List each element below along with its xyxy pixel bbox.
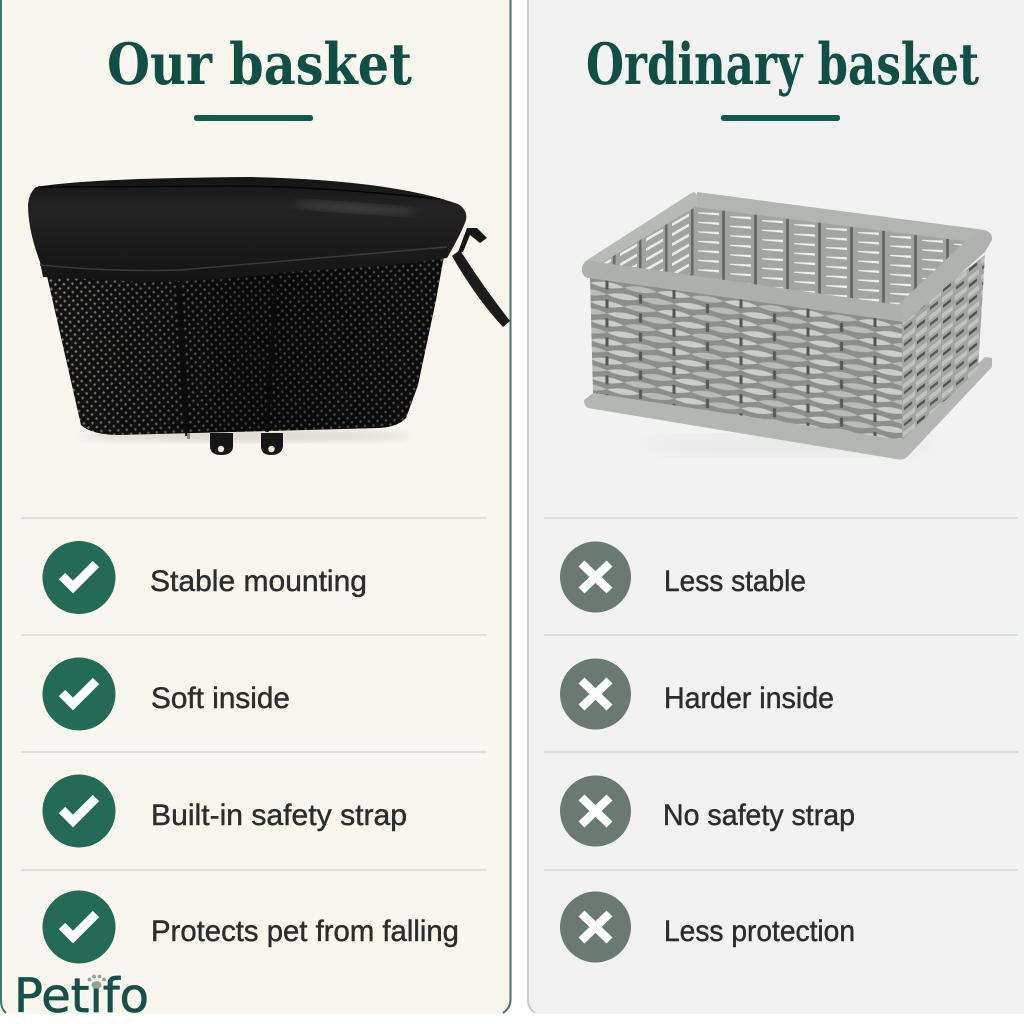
- label: Harder inside: [664, 682, 834, 715]
- feature row 4: [21, 870, 487, 964]
- comparison row 1: [544, 518, 1018, 612]
- product photo: black mesh basket: [28, 177, 510, 455]
- label: Stable mounting: [150, 565, 367, 598]
- icon: check: [42, 774, 116, 848]
- support rods: [179, 276, 276, 436]
- icon: cross: [560, 542, 631, 612]
- base plate: [584, 357, 992, 460]
- left rim: [584, 192, 697, 264]
- cushion seam: [40, 247, 447, 270]
- feature row 1: [21, 518, 487, 614]
- icon: cross: [560, 776, 631, 846]
- icon: check: [42, 658, 116, 730]
- mesh shading: [47, 256, 444, 435]
- icon: cross: [560, 658, 631, 730]
- feature row 2: [21, 635, 487, 730]
- icon: check: [42, 890, 116, 964]
- feature row 3: [21, 752, 487, 848]
- label: No safety strap: [663, 799, 855, 832]
- front rim: [582, 261, 904, 322]
- comparison row 3: [544, 752, 1018, 846]
- comparison row 4: [544, 870, 1018, 962]
- wire mesh body: [47, 256, 444, 435]
- front wall weave: [590, 278, 902, 440]
- back rim: [695, 192, 992, 243]
- icon: check: [42, 541, 116, 614]
- heading underline: [721, 115, 840, 121]
- heading underline: [194, 115, 313, 121]
- label: Protects pet from falling: [151, 915, 459, 948]
- padded cushion cover: [28, 177, 466, 282]
- right wall weave: [902, 255, 985, 440]
- safety strap: [452, 250, 510, 327]
- icon: cross: [560, 892, 631, 962]
- label: Soft inside: [151, 682, 290, 715]
- strap bow: [458, 228, 487, 252]
- inner back wall: [595, 204, 982, 312]
- heading: our basket: Our basket: [107, 31, 413, 98]
- cushion highlight: [293, 199, 417, 217]
- label: Built-in safety strap: [151, 799, 407, 832]
- inner left wall: [598, 204, 696, 275]
- mounting tabs: [187, 433, 283, 455]
- label: Less protection: [664, 915, 855, 948]
- icon: paw: [88, 975, 106, 989]
- label: Less stable: [664, 565, 806, 598]
- comparison row 2: [544, 635, 1018, 730]
- panel: our basket: [0, 0, 511, 1024]
- right rim: [897, 232, 992, 323]
- product photo: grey wicker basket: [582, 192, 992, 460]
- ground shadow: [80, 430, 410, 442]
- panel: ordinary basket: [527, 0, 1024, 1014]
- brand logo: Petifo: Petifo: [14, 969, 149, 1024]
- top seam: [38, 186, 440, 199]
- soft shadow: [640, 435, 940, 455]
